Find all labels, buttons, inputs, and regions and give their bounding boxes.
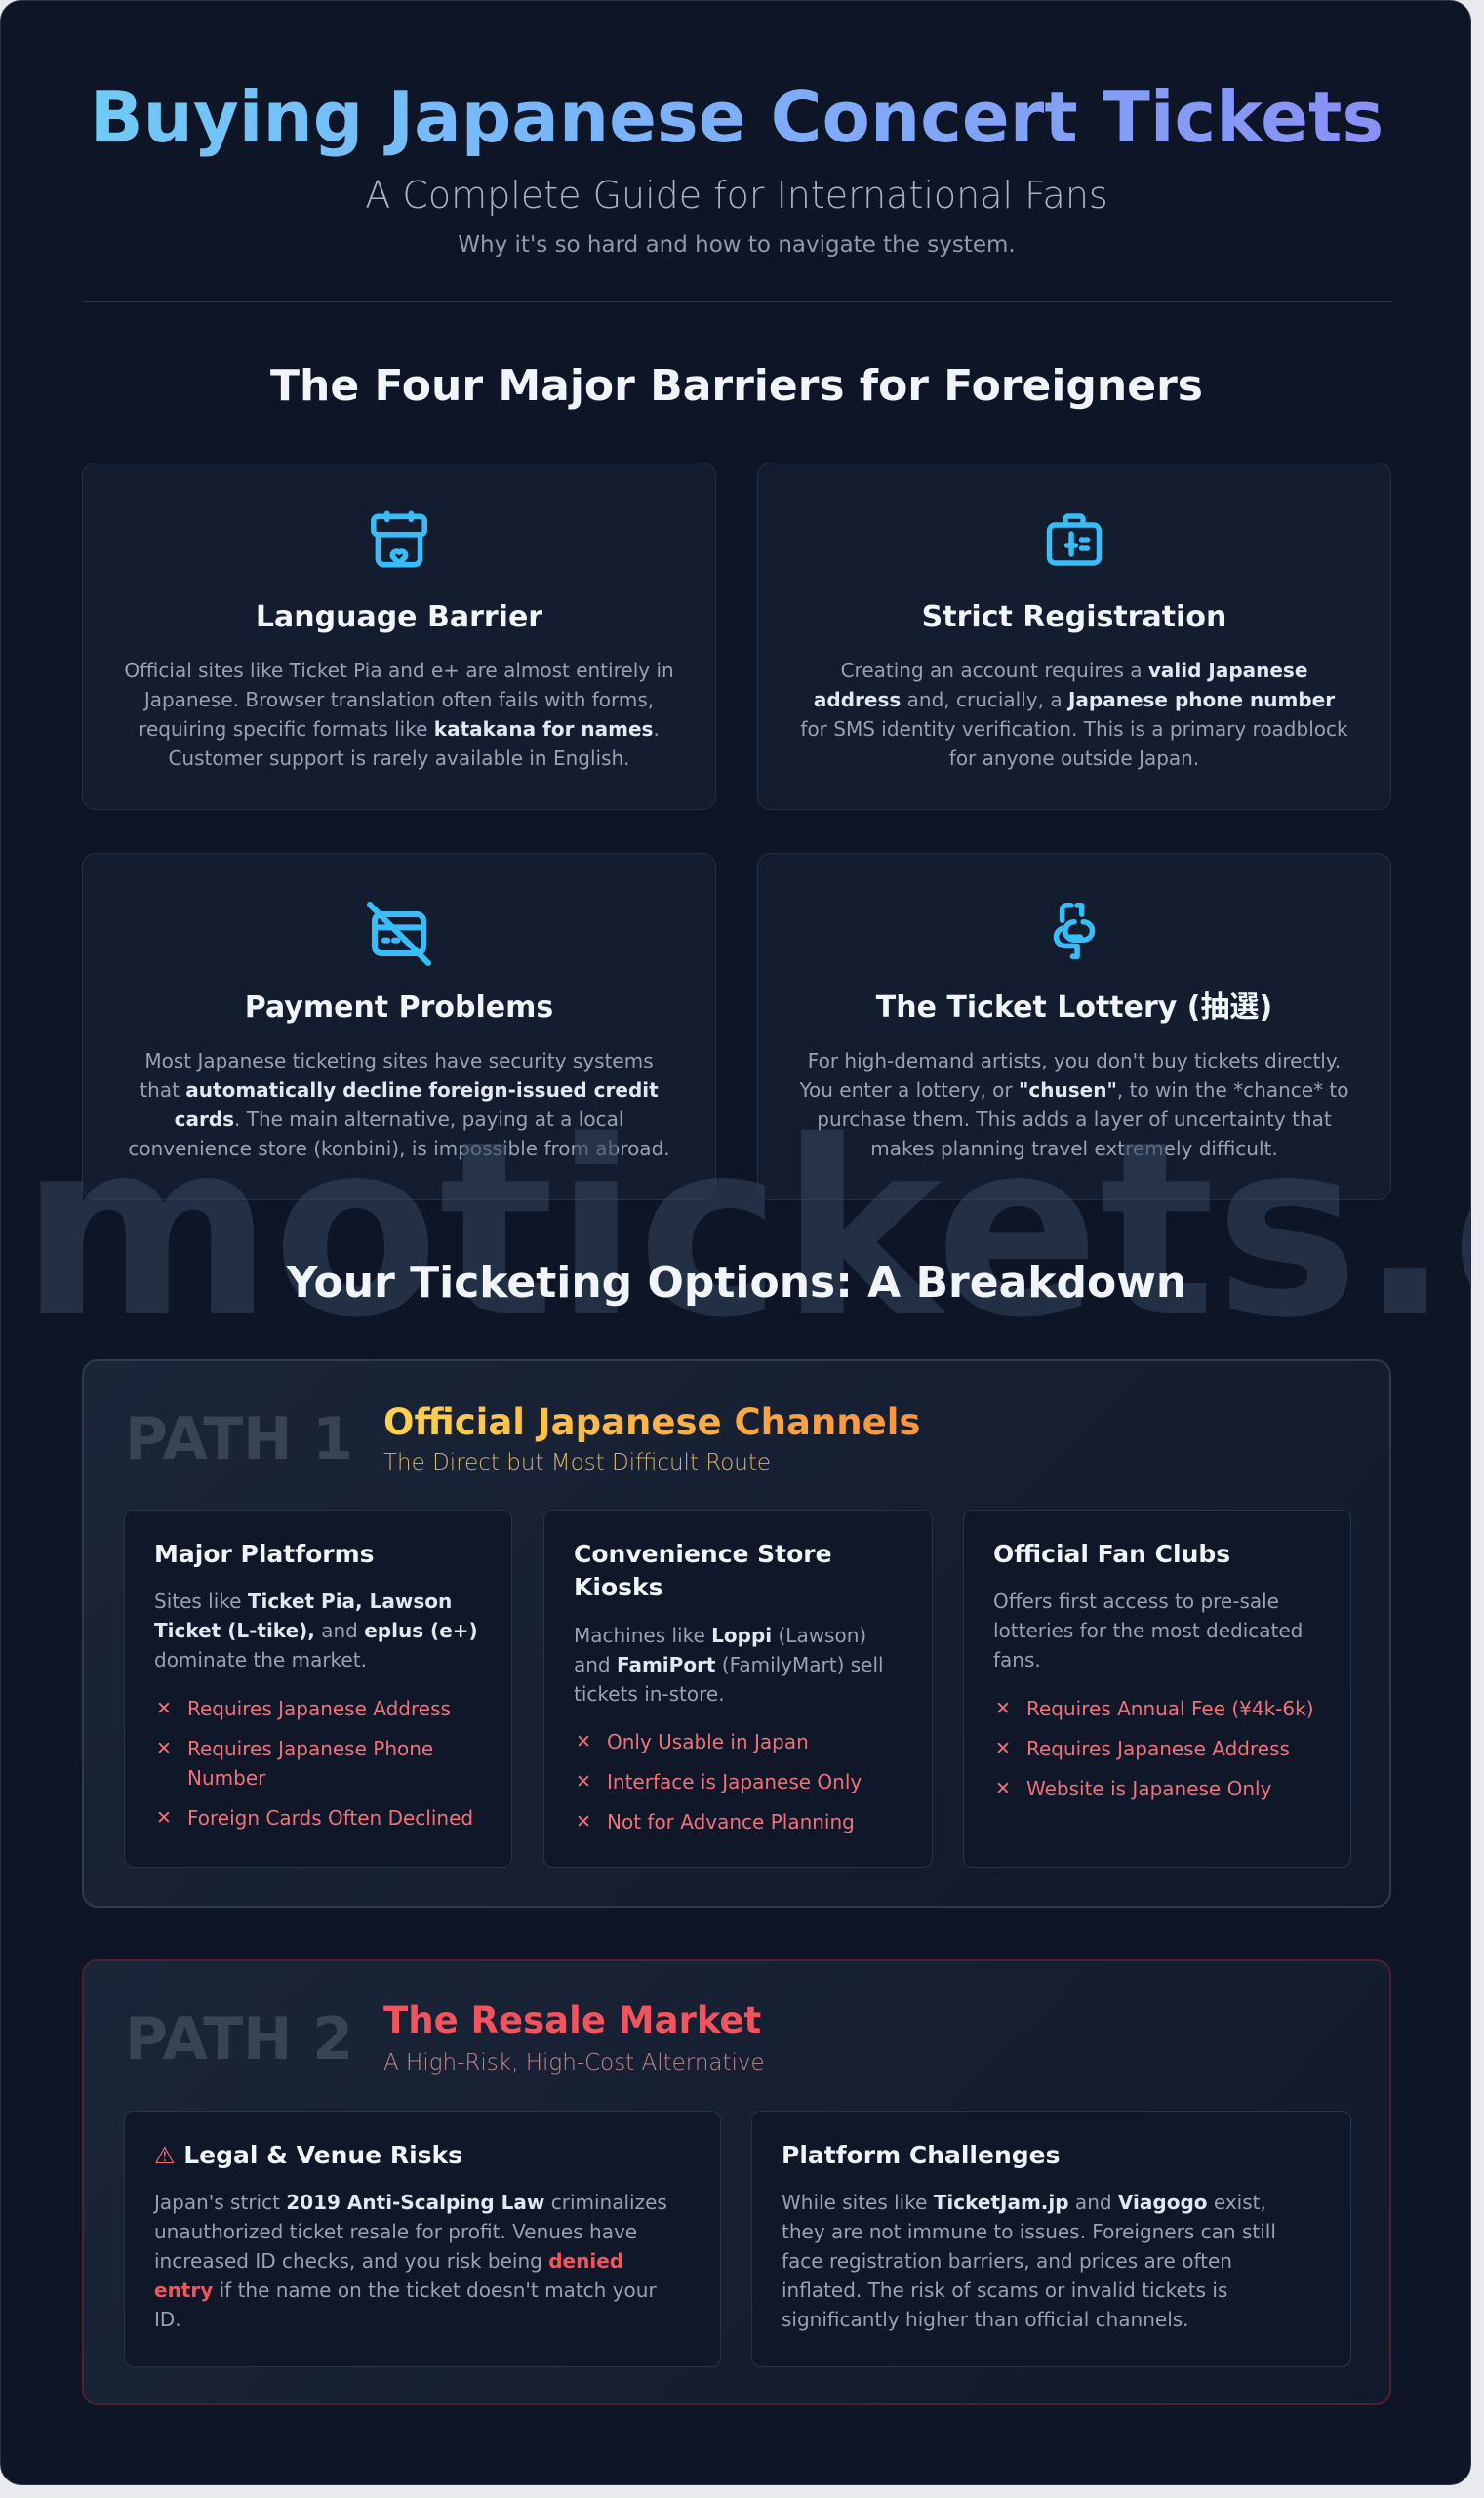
card: strict registration: [757, 463, 1391, 810]
path subtitle: The Direct but Most Difficult Route: [383, 1450, 771, 1475]
card text: For high-demand artists, you don't buy tickets directly. You enter a lottery, or "chusen", to win the *chance* to purchase them. This adds a layer of uncertainty that makes planning travel extremely difficult.: [799, 1049, 1349, 1160]
subtitle: A Complete Guide for International Fans: [365, 174, 1108, 217]
sub-card: platform challenges: [751, 2111, 1351, 2367]
heading: four barriers: The Four Major Barriers for Foreigners: [270, 361, 1203, 411]
sub-card: major platforms: Requires Japanese Phone Number: [187, 1737, 433, 1790]
sub-card: fan clubs: Offers first access to pre-sale lotteries for the most dedicated fans.: [993, 1590, 1303, 1672]
icon: id case: [1046, 513, 1103, 566]
card: payment problems: [82, 853, 716, 1200]
sub-card: fan clubs: [963, 1510, 1351, 1868]
card title: Language Barrier: [256, 600, 542, 634]
path title: The Resale Market: [383, 1999, 761, 2041]
sub-card: convenience store: Convenience Store Kiosks: [574, 1540, 832, 1601]
panel: path 1: [82, 1359, 1391, 1908]
icon: calendar heart: [371, 511, 427, 568]
sub-card: major platforms: Requires Japanese Address: [187, 1697, 451, 1720]
path number: PATH 1: [125, 1405, 353, 1473]
sub-card: major platforms: Foreign Cards Often Declined: [187, 1806, 473, 1830]
icon: lottery: [1054, 903, 1095, 959]
sub-card: major platforms: Major Platforms: [154, 1540, 375, 1568]
sub-card: platform challenges: Platform Challenges: [782, 2141, 1060, 2169]
sub-card: major platforms: [124, 1510, 512, 1868]
sub-card: fan clubs: Website is Japanese Only: [1026, 1777, 1271, 1800]
sub-card: legal risks: Japan's strict 2019 Anti-Scalping Law criminalizes unauthorized ticket resale for profit. Venues have increased ID checks, and you risk being denied entry if the name on the ticket doesn't match your ID.: [154, 2191, 667, 2331]
sub-card: fan clubs: Requires Japanese Address: [1026, 1737, 1290, 1760]
card: language barrier: [82, 463, 716, 810]
sub-card: convenience store: Interface is Japanese Only: [607, 1770, 862, 1793]
path number: PATH 2: [125, 2005, 353, 2074]
card title: The Ticket Lottery (抽選): [876, 990, 1272, 1025]
card text: Creating an account requires a valid Japanese address and, crucially, a Japanese phone number for SMS identity verification. This is a primary roadblock for anyone outside Japan.: [800, 659, 1348, 770]
sub-card: convenience store: Only Usable in Japan: [607, 1730, 809, 1753]
sub-card: legal risks: ⚠ Legal & Venue Risks: [154, 2141, 462, 2169]
sub-card: convenience store: Machines like Loppi (Lawson) and FamiPort (FamilyMart) sell tickets in-store.: [574, 1624, 884, 1706]
card title: Strict Registration: [922, 600, 1226, 634]
sub-card: legal risks: [124, 2111, 721, 2367]
sub-card: fan clubs: Requires Annual Fee (¥4k-6k): [1026, 1697, 1314, 1720]
panel: path 2: [82, 1959, 1391, 2405]
sub-card: platform challenges: While sites like TicketJam.jp and Viagogo exist, they are not immune to issues. Foreigners can still face registration barriers, and prices are often inflated. The risk of scams or invalid tickets is significantly higher than official channels.: [782, 2191, 1276, 2331]
card: ticket lottery: [757, 853, 1391, 1200]
sub-card: major platforms: Sites like Ticket Pia, Lawson Ticket (L-tike), and eplus (e+) dominate the market.: [154, 1590, 478, 1672]
path subtitle: A High-Risk, High-Cost Alternative: [383, 2050, 765, 2075]
tagline: Why it's so hard and how to navigate the system.: [458, 232, 1016, 258]
icon: card crossed: [367, 902, 431, 966]
sub-card: convenience store: Not for Advance Planning: [607, 1810, 855, 1833]
path title: Official Japanese Channels: [383, 1401, 920, 1443]
sub-card: fan clubs: Official Fan Clubs: [993, 1540, 1230, 1568]
sub-card: convenience store: [543, 1510, 933, 1868]
card text: Most Japanese ticketing sites have security systems that automatically decline foreign-issued credit cards. The main alternative, paying at a local convenience store (konbini), is impossible from abroad.: [128, 1049, 670, 1160]
heading: options breakdown: Your Ticketing Options: A Breakdown: [287, 1258, 1186, 1308]
card text: Official sites like Ticket Pia and e+ are almost entirely in Japanese. Browser translation often fails with forms, requiring specific formats like katakana for names. Customer support is rarely available in English.: [124, 659, 674, 770]
card title: Payment Problems: [245, 990, 553, 1025]
title: Buying Japanese Concert Tickets: [90, 76, 1384, 158]
